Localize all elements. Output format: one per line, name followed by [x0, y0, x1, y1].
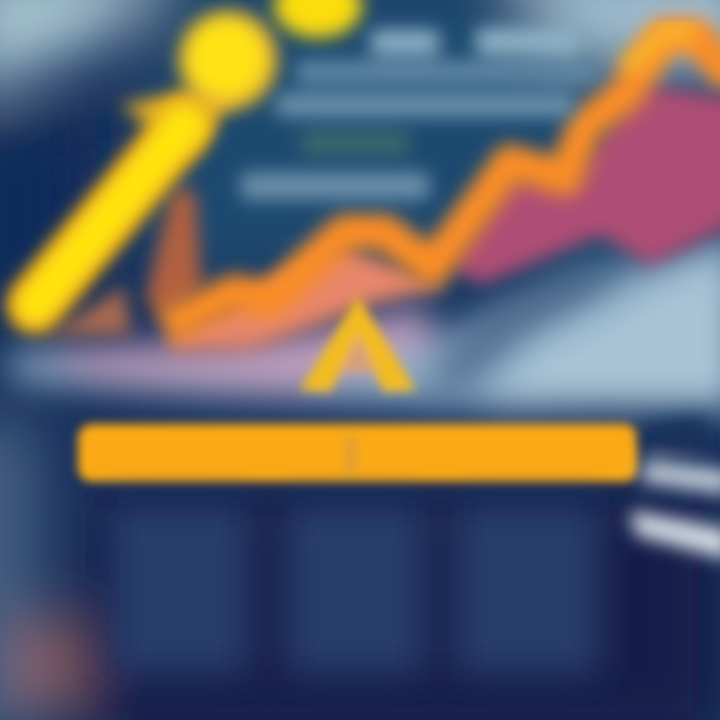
chart: orange rising line: [165, 35, 720, 328]
orange header bar: [78, 424, 638, 482]
yellow circle: [178, 10, 278, 110]
dark shadow band on the slope: [425, 262, 620, 395]
chart: yellow line highlight: [625, 32, 695, 70]
right side paper stripes: [630, 416, 720, 560]
yellow sun at top: [274, 0, 362, 38]
table: three columns of text: [110, 505, 600, 675]
column 3: [455, 505, 600, 675]
mountain slope: lower right: [10, 230, 720, 410]
yellow letter A marker: [300, 296, 416, 392]
chart: area under the line: [50, 85, 720, 350]
column 2: [285, 505, 425, 675]
yellow arrow: rising diagonal bar: [35, 80, 245, 305]
column 1: [110, 505, 250, 675]
title text block: [240, 28, 595, 200]
